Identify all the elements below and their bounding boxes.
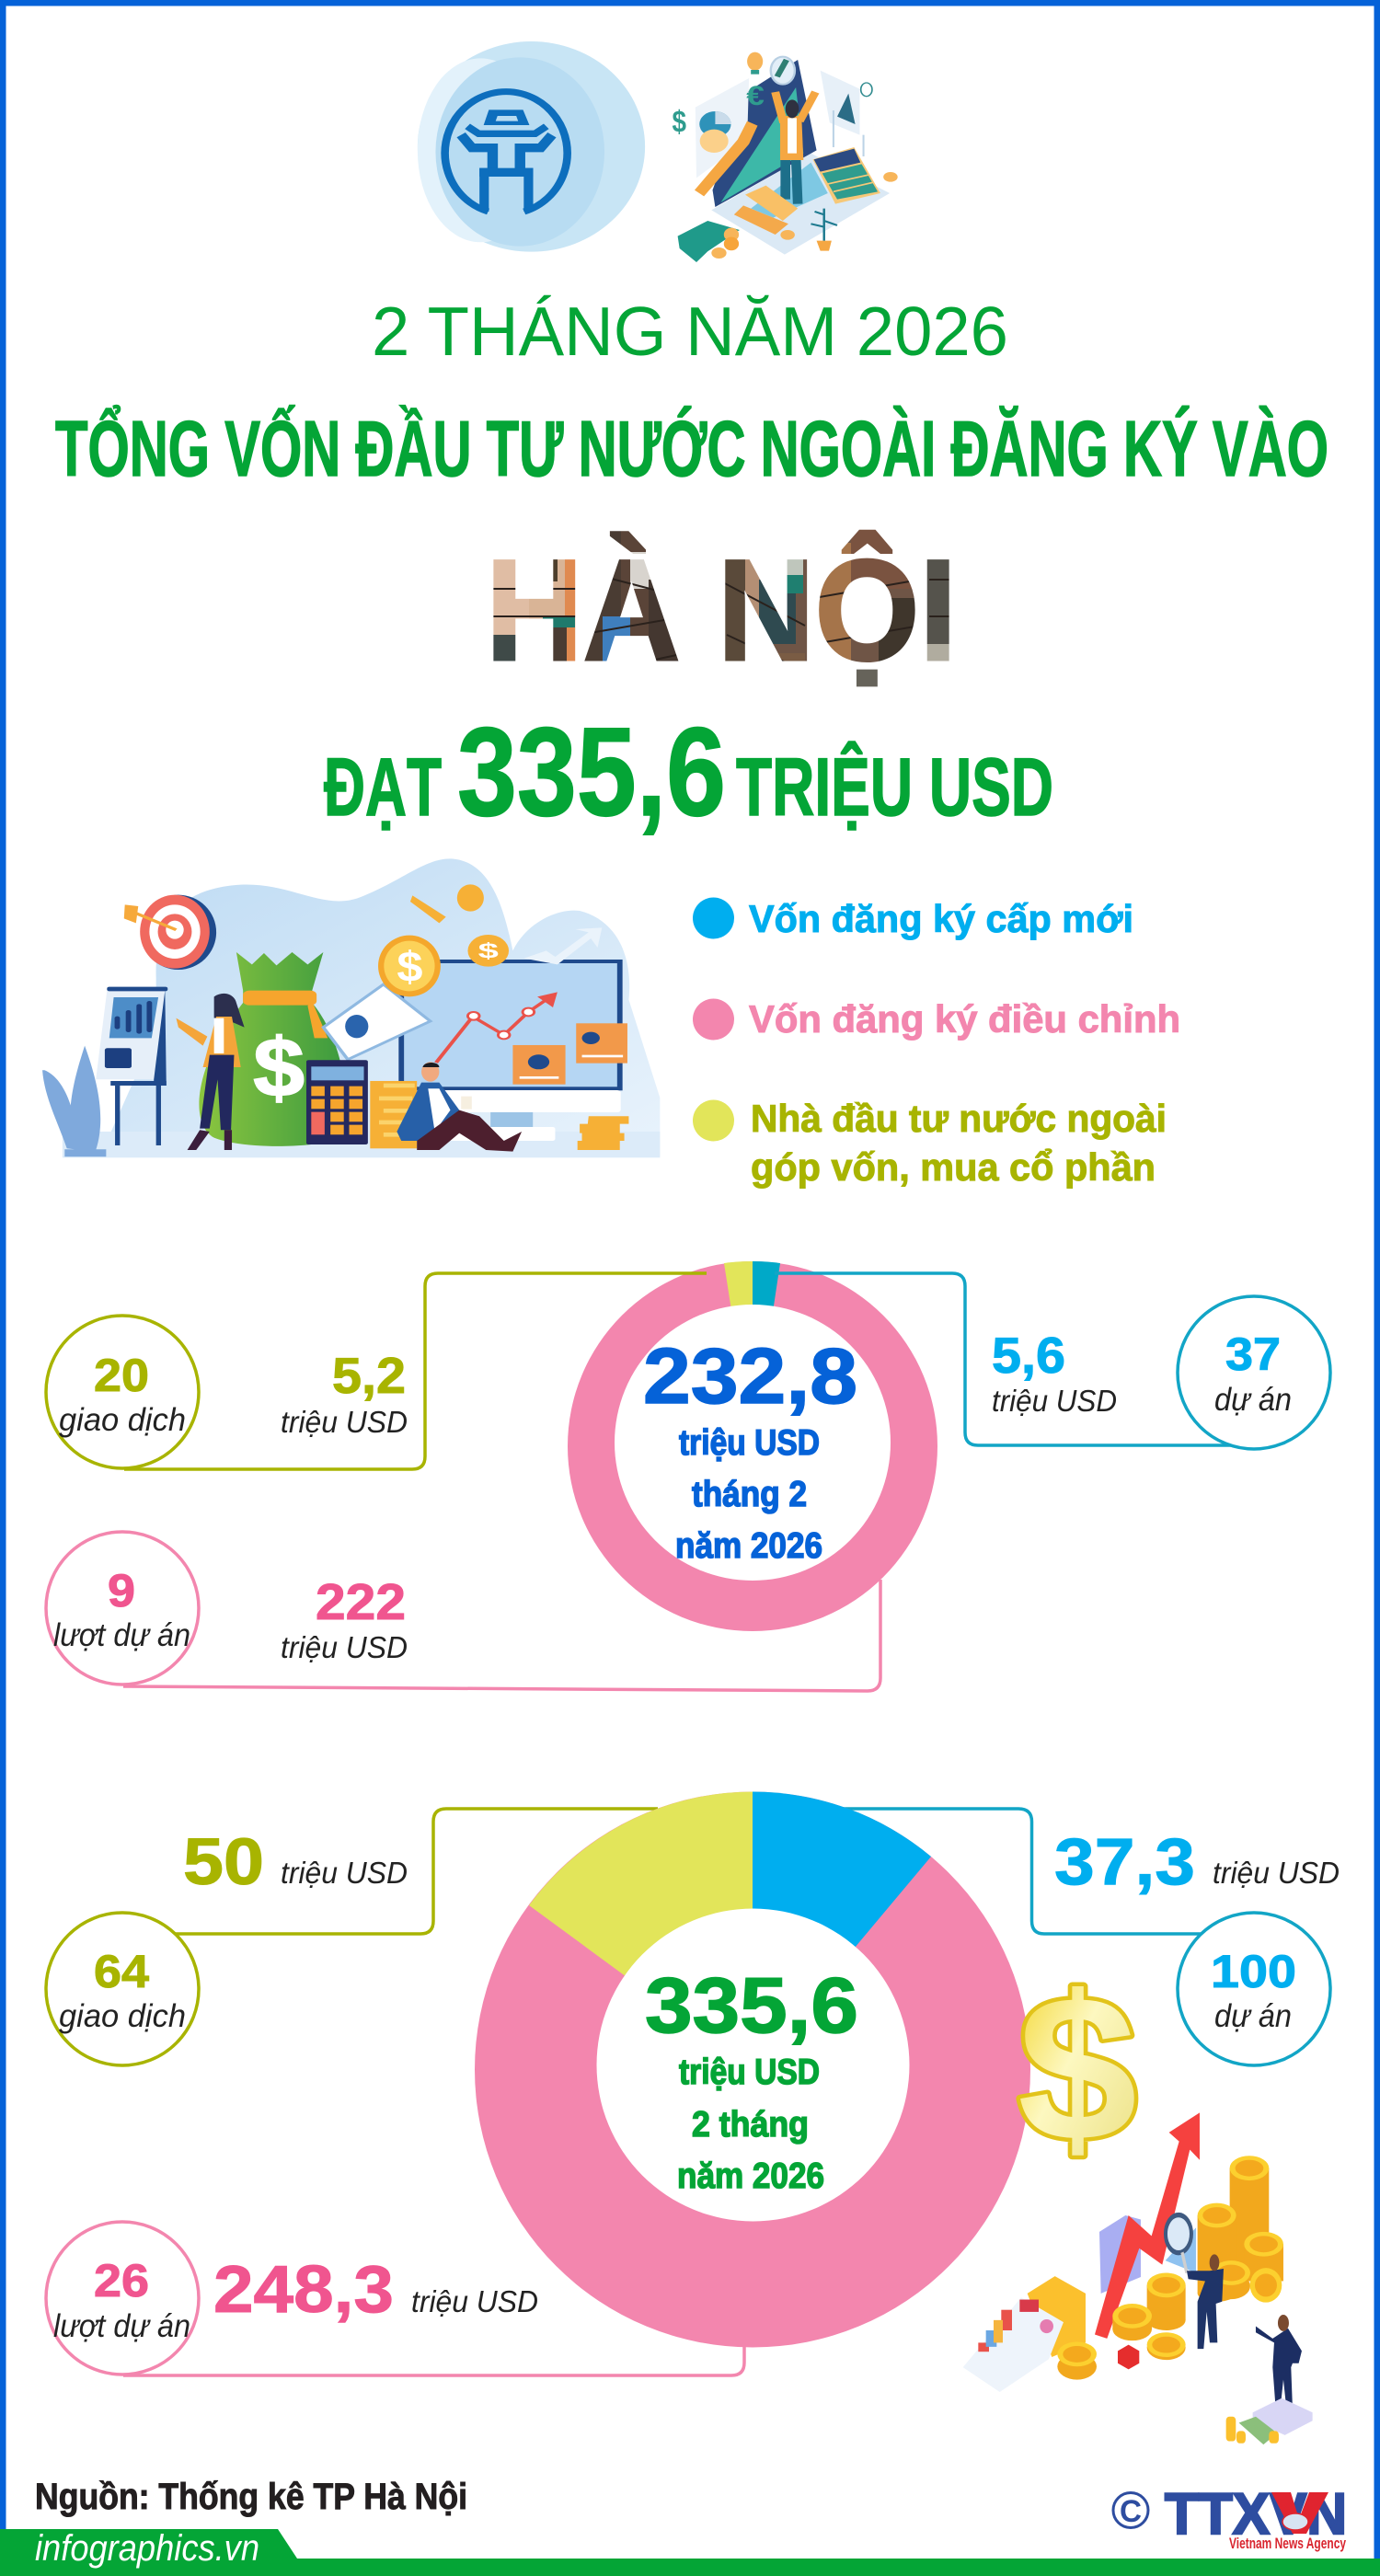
donut chart: February 2026 <box>568 1261 937 1631</box>
connector: two-month teal <box>833 1809 1202 1934</box>
illustration: business people with coins and rising arrow <box>963 2112 1313 2444</box>
callout: two-month new projects <box>1178 1913 1330 2065</box>
donut chart: two months 2026 <box>475 1792 1030 2348</box>
connector: February pink <box>123 1580 880 1691</box>
donut center: two-month total: 2 tháng <box>692 2105 809 2145</box>
donut center: February total: năm 2026 <box>675 1526 822 1566</box>
calculator <box>306 1060 368 1144</box>
connector: February olive <box>124 1273 707 1469</box>
value: February adjusted capital: triệu USD <box>281 1630 408 1664</box>
connector: two-month olive <box>175 1809 658 1934</box>
illustration: money bag and investors: $ <box>253 1021 305 1114</box>
coins <box>378 936 441 996</box>
value: February new capital: 5,6 <box>992 1327 1065 1384</box>
callout: two-month new projects: dự án <box>1214 1998 1292 2034</box>
legend item: capital contributions: Nhà đầu tư nước ngoài <box>751 1097 1167 1140</box>
callout: February adjusted projects: lượt dự án <box>53 1617 190 1653</box>
seated man <box>397 1083 459 1141</box>
source note: Nguồn: Thống kê TP Hà Nội <box>35 2477 467 2517</box>
donut center: two-month total: 335,6 <box>645 1962 858 2050</box>
value: two-month new capital: triệu USD <box>1213 1856 1340 1890</box>
connector: February teal <box>775 1273 1237 1445</box>
legend item: capital contributions <box>693 1097 1167 1189</box>
value: February equity: triệu USD <box>281 1405 408 1439</box>
title: headline total: ĐẠT <box>324 741 442 833</box>
illustration detail: leaves <box>42 1046 106 1156</box>
callout: February equity deals <box>46 1316 199 1468</box>
donut center: two-month total <box>645 1962 858 2196</box>
callout: two-month adjusted projects <box>46 2222 199 2375</box>
target <box>141 895 216 970</box>
value: two-month adjusted capital <box>213 2253 538 2327</box>
value: February adjusted capital: 222 <box>316 1573 406 1630</box>
stacked coins <box>370 1081 417 1148</box>
logo: TTXVN Vietnam News Agency: C <box>1120 2494 1142 2529</box>
footer band <box>0 2528 1380 2576</box>
logo: TTXVN Vietnam News Agency <box>1113 2482 1347 2552</box>
donut center: two-month total: triệu USD <box>679 2053 820 2092</box>
first analyst figure <box>1187 2269 1224 2349</box>
callout: February new projects: 37 <box>1225 1328 1281 1380</box>
title: Hanoi photo-filled lettering: HÀ NỘI <box>486 531 957 691</box>
callout: two-month adjusted projects: lượt dự án <box>53 2308 190 2344</box>
callout: February equity deals: 20 <box>94 1350 149 1401</box>
legend item: new registered capital: Vốn đăng ký cấp mới <box>749 897 1133 940</box>
donut center: February total <box>643 1333 857 1566</box>
callout: two-month equity deals: giao dịch <box>59 1998 186 2034</box>
value: February new capital <box>992 1327 1117 1418</box>
value: February adjusted capital <box>281 1573 408 1664</box>
icon: investor on laptop illustration: € <box>746 81 765 111</box>
value: February equity <box>281 1347 408 1439</box>
icon: investor on laptop illustration: $ <box>672 104 686 138</box>
callout: February equity deals: giao dịch <box>59 1402 186 1438</box>
icon: investor on laptop illustration <box>672 52 898 262</box>
bag <box>199 952 345 1146</box>
donut center: February total: 232,8 <box>643 1333 857 1420</box>
logo: TTXVN Vietnam News Agency: TTXVN <box>1165 2482 1347 2547</box>
callout: two-month equity deals: 64 <box>94 1946 149 1997</box>
value: February new capital: triệu USD <box>992 1384 1117 1418</box>
coin stacks <box>1057 2156 1283 2380</box>
callout: two-month new projects: 100 <box>1211 1946 1296 1997</box>
callout: two-month equity deals <box>46 1913 199 2065</box>
legend <box>693 897 1180 1189</box>
value: two-month equity: 50 <box>183 1826 264 1899</box>
icon: Hanoi city emblem <box>418 41 645 252</box>
banknote <box>323 984 431 1060</box>
legend item: capital contributions: góp vốn, mua cổ phần <box>751 1145 1156 1189</box>
value: February equity: 5,2 <box>332 1347 406 1404</box>
title: period: 2 THÁNG NĂM 2026 <box>372 293 1008 370</box>
second analyst figure <box>1256 2327 1302 2409</box>
value: two-month adjusted capital: triệu USD <box>411 2284 538 2318</box>
callout: February adjusted projects: 9 <box>108 1565 135 1616</box>
icon: golden dollar sign: $ <box>1018 1952 1137 2184</box>
callout: February new projects: dự án <box>1214 1382 1292 1418</box>
illustration: money bag and investors: $ <box>478 940 499 963</box>
value: two-month equity <box>183 1826 408 1899</box>
illustration: money bag and investors <box>42 858 660 1157</box>
flip chart <box>96 991 165 1079</box>
callout: two-month adjusted projects: 26 <box>94 2255 149 2306</box>
donut center: February total: triệu USD <box>679 1423 820 1463</box>
value: two-month equity: triệu USD <box>281 1856 408 1890</box>
chart line <box>436 996 551 1063</box>
illustration: money bag and investors: $ <box>397 943 422 991</box>
donut center: two-month total: năm 2026 <box>677 2156 824 2196</box>
footer brand text: infographics.vn <box>35 2528 259 2569</box>
title: headline total: TRIỆU USD <box>736 741 1053 833</box>
value: two-month new capital <box>1054 1826 1340 1899</box>
value: two-month new capital: 37,3 <box>1054 1826 1195 1899</box>
donut center: February total: tháng 2 <box>692 1475 807 1514</box>
connector: two-month pink <box>123 2341 744 2375</box>
value: two-month adjusted capital: 248,3 <box>213 2253 394 2327</box>
woman <box>214 994 245 1028</box>
legend item: adjusted capital: Vốn đăng ký điều chỉnh <box>749 997 1180 1041</box>
callout: February new projects <box>1178 1296 1330 1449</box>
callout: February adjusted projects <box>46 1532 199 1685</box>
title: headline total: 335,6 <box>457 702 726 843</box>
